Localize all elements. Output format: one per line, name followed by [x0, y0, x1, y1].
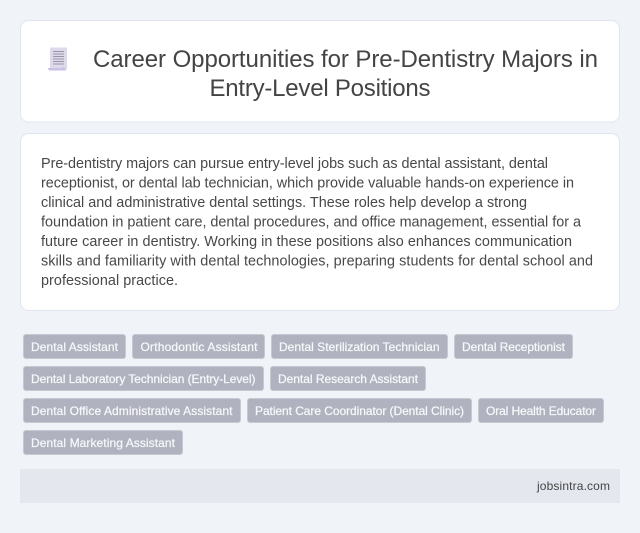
tag: Orthodontic Assistant: Orthodontic Assistant — [140, 340, 258, 354]
tag: Dental Receptionist: Dental Receptionist — [462, 340, 566, 354]
footer: jobsintra.com — [536, 479, 610, 493]
text block: description: Pre-dentistry majors can pursue entry-level jobs such as dental assistant, dental — [41, 156, 548, 172]
tag: Patient Care Coordinator (Dental Clinic): Patient Care Coordinator (Dental Clinic) — [255, 404, 464, 418]
tag: Patient Care Coordinator (Dental Clinic) — [248, 398, 472, 422]
title: Entry-Level Positions — [210, 75, 430, 102]
tag: Oral Health Educator: Oral Health Educator — [486, 404, 596, 418]
text block: description: receptionist, or dental lab technician, which provide valuable hands-on experience in — [41, 176, 574, 192]
title: Career Opportunities for Pre-Dentistry Majors in — [93, 46, 598, 73]
icon: document scroll — [48, 48, 67, 70]
tag: Dental Office Administrative Assistant: Dental Office Administrative Assistant — [31, 404, 233, 418]
tag: Dental Marketing Assistant — [24, 430, 182, 454]
text block: description — [41, 156, 593, 289]
panel: header — [20, 20, 620, 122]
tag: Dental Research Assistant — [270, 366, 426, 390]
tag: Dental Assistant — [24, 334, 126, 358]
tag: Dental Sterilization Technician: Dental Sterilization Technician — [279, 340, 440, 354]
text block: description: future career in dentistry. Working in these positions also enhances communication — [41, 234, 572, 250]
tag: Dental Receptionist — [454, 334, 572, 358]
tag: Dental Marketing Assistant: Dental Marketing Assistant — [31, 436, 176, 450]
text block: description: skills and familiarity with dental technologies, preparing students for dental school and — [41, 254, 593, 270]
title — [93, 46, 598, 102]
text block: description: foundation in patient care, dental procedures, and office management, essential for a — [41, 214, 581, 230]
text block: description: professional practice. — [41, 273, 178, 289]
panel: description — [20, 134, 620, 310]
tag: Dental Laboratory Technician (Entry-Level): Dental Laboratory Technician (Entry-Level) — [31, 372, 256, 386]
tag: Dental Assistant: Dental Assistant — [31, 340, 119, 354]
tag: Dental Sterilization Technician — [272, 334, 448, 358]
tag: Dental Office Administrative Assistant — [24, 398, 240, 422]
tags — [24, 334, 604, 454]
tag: Orthodontic Assistant — [132, 334, 264, 358]
text block: description: clinical and administrative dental settings. These roles help develop a strong — [41, 195, 527, 211]
tag: Dental Research Assistant: Dental Research Assistant — [278, 372, 419, 386]
tag: Dental Laboratory Technician (Entry-Level) — [24, 366, 264, 390]
tag: Oral Health Educator — [478, 398, 604, 422]
footer — [20, 469, 620, 503]
